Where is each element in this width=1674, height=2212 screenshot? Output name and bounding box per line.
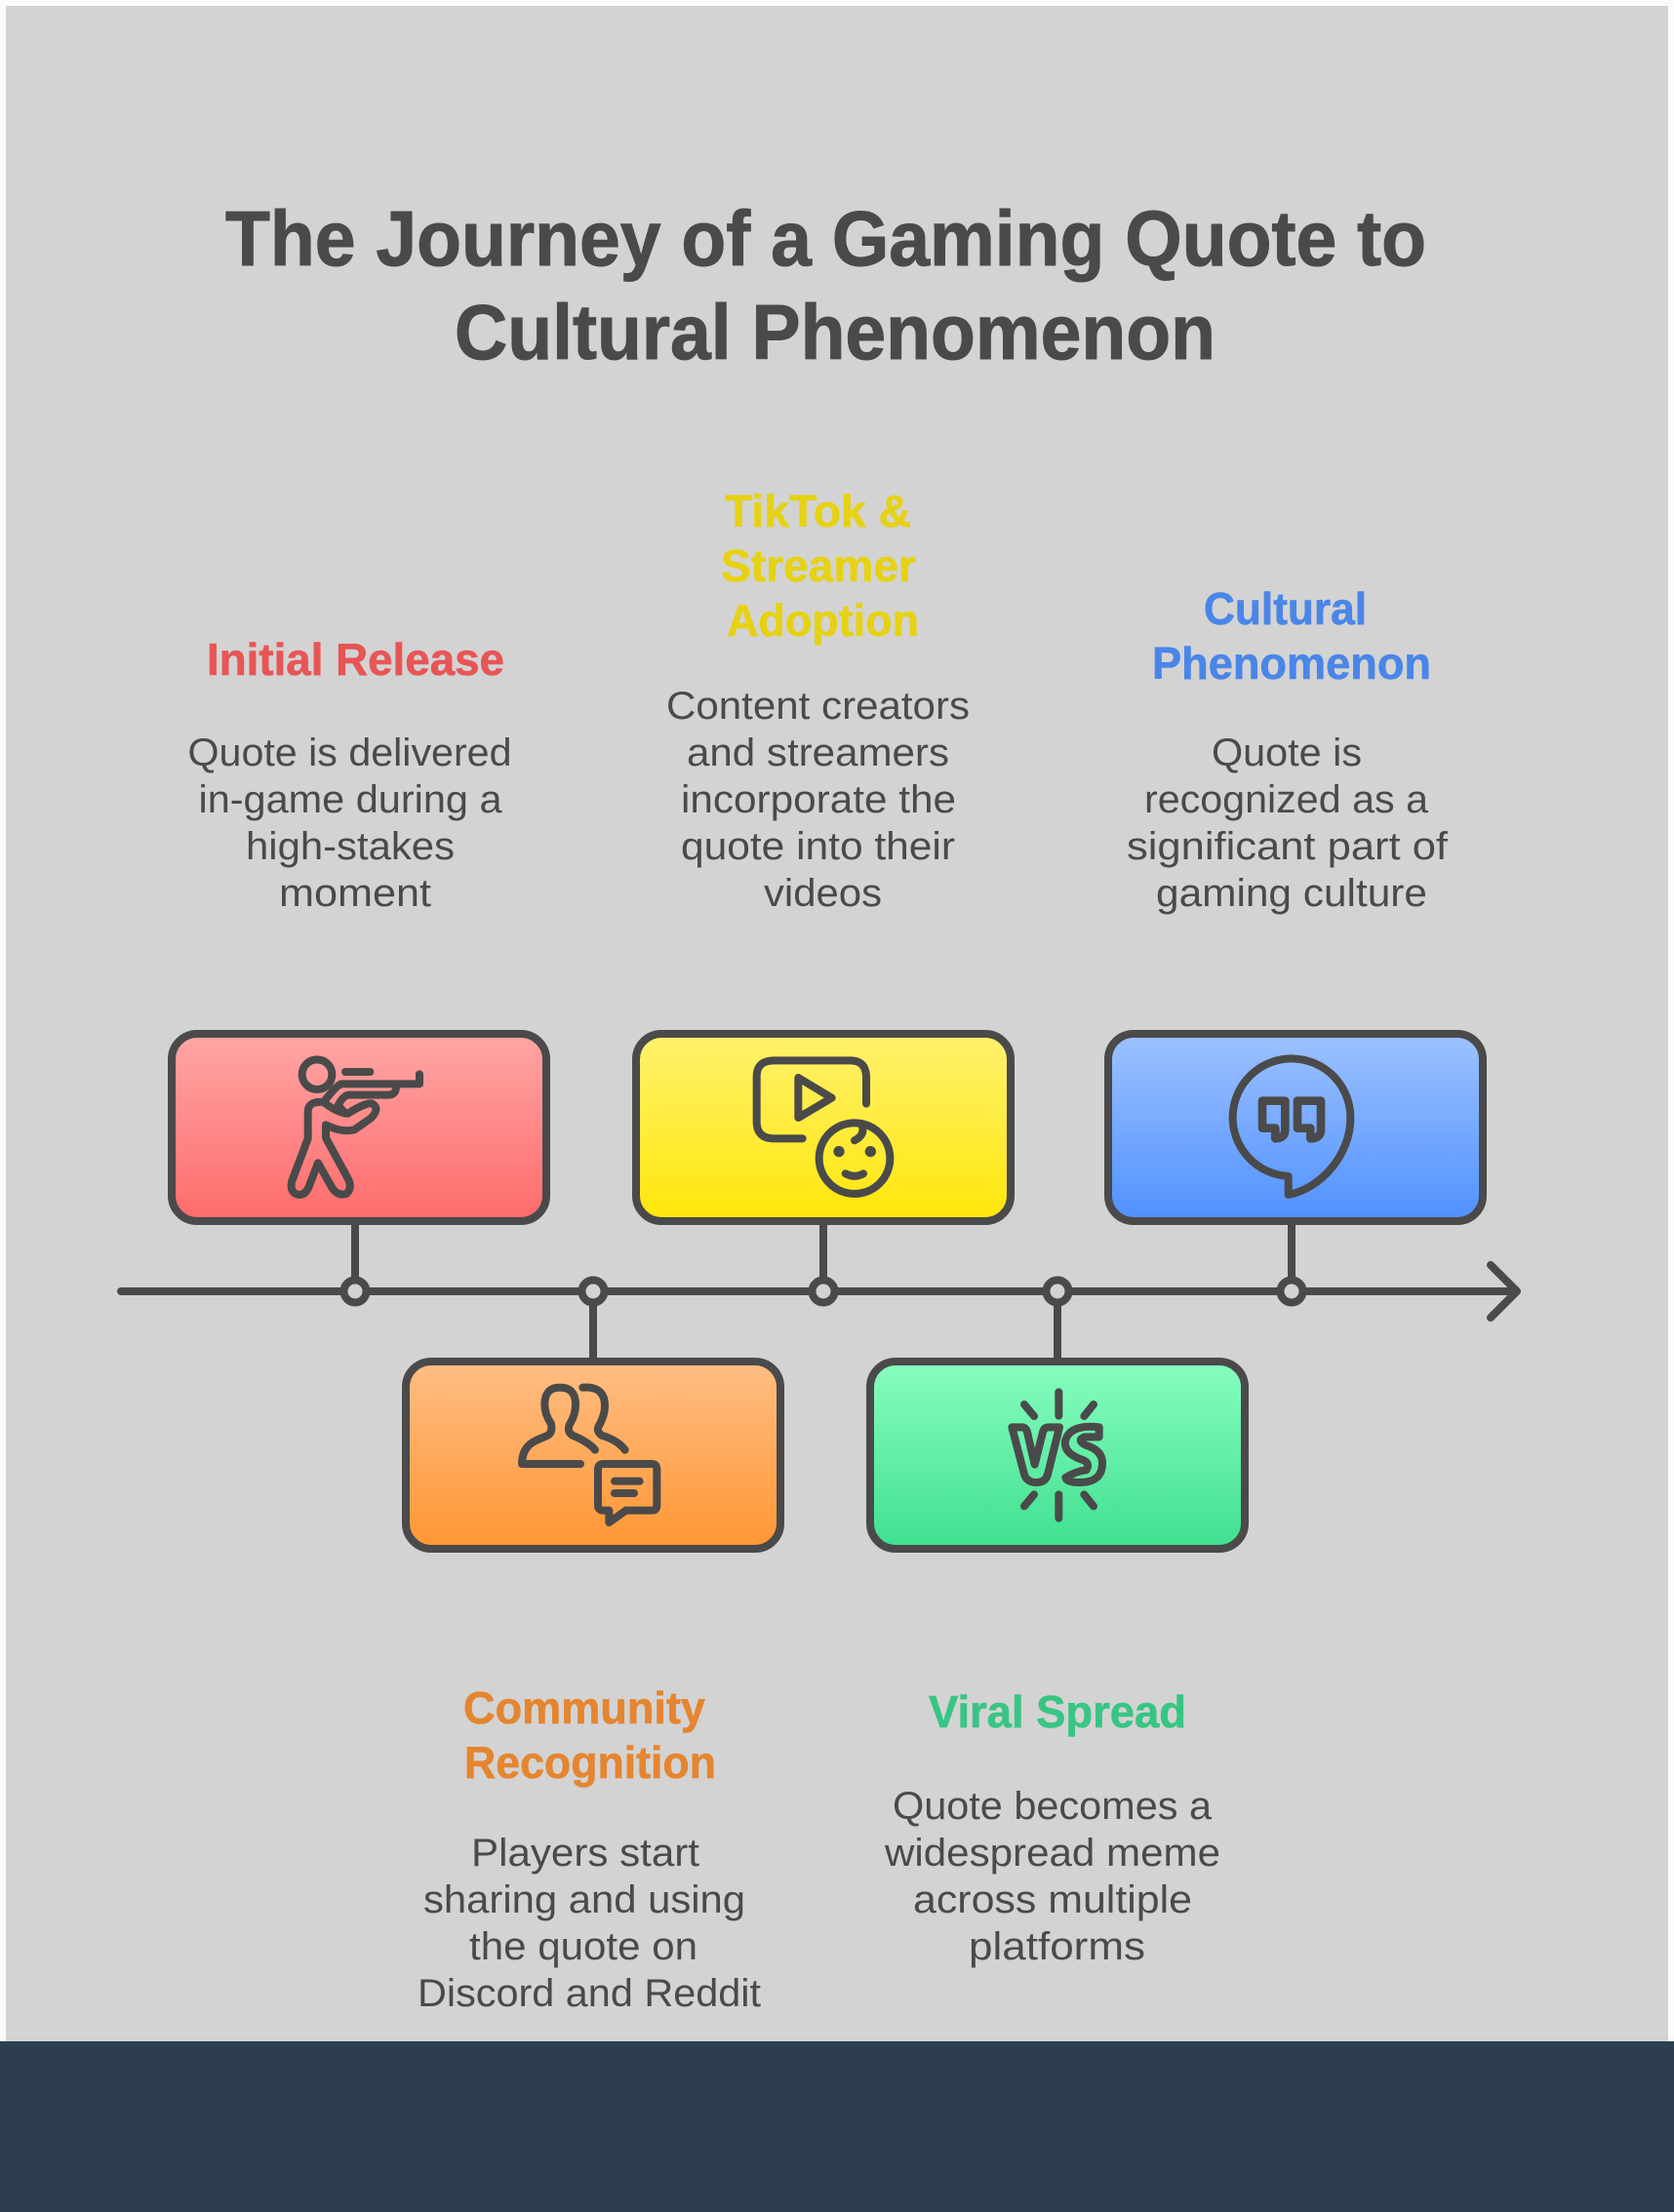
card: orange (406, 1362, 780, 1549)
text: viral description: across multiple (913, 1878, 1192, 1921)
heading: tiktok and streamer adoption: TikTok & (725, 486, 911, 536)
text: cultural description: gaming culture (1156, 872, 1427, 915)
text: cultural description: Quote is (1212, 731, 1362, 774)
text: community description (418, 1832, 761, 2015)
heading: tiktok and streamer adoption: Adoption (727, 595, 919, 646)
card: green (870, 1362, 1245, 1549)
heading: cultural phenomenon (1152, 583, 1431, 689)
connector and marker (1046, 1280, 1069, 1358)
text: community description: Discord and Reddit (418, 1972, 761, 2015)
connector and marker (343, 1225, 367, 1303)
text: tiktok description: and streamers (687, 731, 949, 774)
text: cultural description: recognized as a (1144, 778, 1429, 821)
heading: tiktok and streamer adoption (721, 486, 919, 646)
text: initial release description: in-game during a (199, 778, 502, 821)
panel: initial release (172, 634, 546, 1303)
text: community description: sharing and using (423, 1878, 745, 1921)
heading: community recognition: Recognition (464, 1737, 716, 1788)
text: tiktok description (666, 685, 970, 915)
title (225, 195, 1426, 375)
title: The Journey of a Gaming Quote to (225, 195, 1426, 282)
icon: versus burst (1012, 1392, 1102, 1519)
icon: community chat (522, 1387, 657, 1522)
text: community description: the quote on (469, 1925, 698, 1968)
text: initial release description: moment (279, 872, 431, 915)
heading: initial release: Initial Release (207, 634, 504, 685)
heading: community recognition: Community (463, 1682, 705, 1733)
text: tiktok description: videos (764, 872, 882, 915)
icon: video and baby face (757, 1060, 890, 1194)
footer bar (0, 2041, 1674, 2212)
text: cultural description (1127, 731, 1449, 915)
text: tiktok description: incorporate the (681, 778, 956, 821)
icon: sniper (292, 1059, 419, 1195)
title: Cultural Phenomenon (455, 289, 1216, 375)
text: initial release description: high-stakes (246, 825, 455, 868)
text: cultural description: significant part of (1127, 825, 1449, 868)
heading: community recognition (463, 1682, 716, 1788)
connector and marker (812, 1225, 835, 1303)
card: red (172, 1034, 546, 1221)
card: blue (1108, 1034, 1483, 1221)
connector and marker (1280, 1225, 1303, 1303)
text: viral description: Quote becomes a (893, 1785, 1213, 1828)
text: viral description: widespread meme (884, 1832, 1220, 1875)
text: tiktok description: quote into their (681, 825, 955, 868)
heading: viral spread: Viral Spread (929, 1686, 1186, 1737)
text: initial release description: Quote is delivered (187, 731, 511, 774)
text: community description: Players start (471, 1832, 699, 1875)
text: viral description (884, 1785, 1220, 1968)
heading: cultural phenomenon: Phenomenon (1152, 638, 1431, 689)
panel: tiktok and streamer adoption (636, 486, 1011, 1303)
connector and marker (581, 1280, 605, 1358)
text: viral description: platforms (969, 1925, 1145, 1968)
heading: tiktok and streamer adoption: Streamer (721, 540, 916, 591)
card: yellow (636, 1034, 1011, 1221)
timeline arrow (121, 1265, 1517, 1318)
text: tiktok description: Content creators (666, 685, 970, 728)
panel: cultural phenomenon (1108, 583, 1483, 1303)
icon: quote bubble (1233, 1058, 1350, 1195)
panel: viral spread (870, 1280, 1245, 1968)
text: initial release description (187, 731, 511, 915)
panel: community recognition (406, 1280, 780, 2015)
heading: cultural phenomenon: Cultural (1204, 583, 1367, 634)
